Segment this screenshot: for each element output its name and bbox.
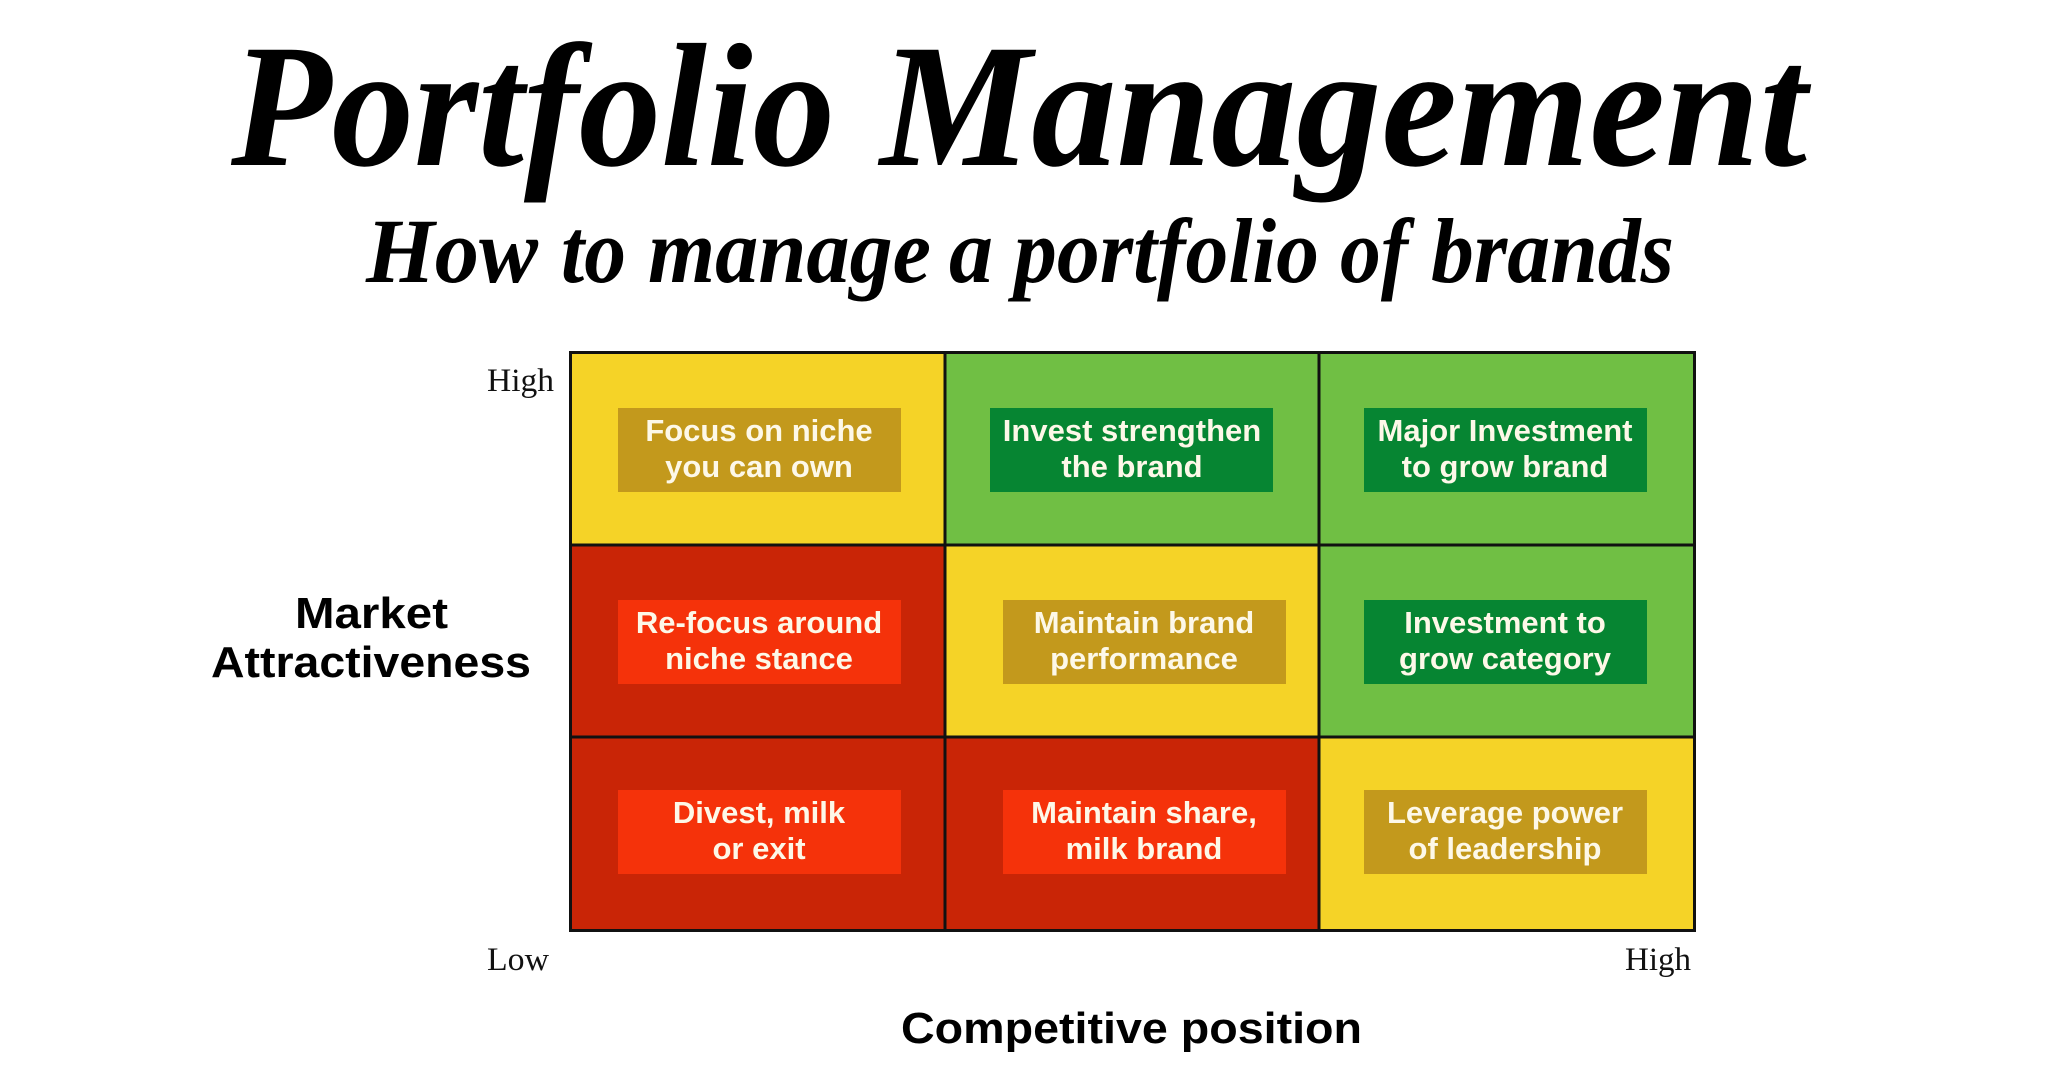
strategy: divest: or exit	[712, 831, 806, 866]
strategy: grow category: Investment to	[1404, 605, 1606, 640]
strategy: invest strengthen: Invest strengthen	[1003, 413, 1261, 448]
y axis title: Market	[295, 589, 448, 638]
matrix	[570, 352, 1695, 930]
subtitle	[365, 200, 1674, 302]
strategy: focus on niche: you can own	[665, 449, 853, 484]
strategy: focus on niche: Focus on niche	[645, 413, 873, 448]
strategy: re-focus: Re-focus around	[636, 605, 882, 640]
subtitle: portfolio	[1007, 200, 1319, 302]
strategy: invest strengthen	[990, 408, 1273, 492]
strategy: maintain performance: performance	[1050, 641, 1238, 676]
strategy: grow category	[1364, 600, 1647, 684]
strategy: maintain performance: Maintain brand	[1034, 605, 1254, 640]
y axis title: Attractiveness	[211, 638, 531, 687]
strategy: divest	[618, 790, 901, 874]
strategy: leverage power: of leadership	[1409, 831, 1601, 866]
strategy: major investment: to grow brand	[1402, 449, 1608, 484]
y axis high label: High	[487, 363, 555, 399]
y axis low label: Low	[487, 942, 549, 978]
grid lines	[570, 352, 1695, 930]
subtitle: a	[949, 200, 993, 302]
strategy: maintain share: Maintain share,	[1031, 795, 1257, 830]
strategy: invest strengthen: the brand	[1061, 449, 1203, 484]
strategy: maintain share: milk brand	[1066, 831, 1222, 866]
subtitle: of	[1340, 200, 1415, 302]
strategy: grow category: grow category	[1399, 641, 1612, 676]
strategy: major investment	[1364, 408, 1647, 492]
strategy: re-focus: niche stance	[665, 641, 853, 676]
strategy: major investment: Major Investment	[1378, 413, 1632, 448]
subtitle: manage	[648, 200, 931, 302]
subtitle: How	[365, 200, 539, 302]
subtitle: to	[561, 200, 626, 302]
strategy: maintain share	[1003, 790, 1286, 874]
title: Portfolio	[230, 9, 835, 204]
strategy: leverage power: Leverage power	[1387, 795, 1623, 830]
x axis title: Competitive position	[901, 1004, 1362, 1053]
cell backgrounds	[571, 353, 1694, 930]
strategy: leverage power	[1364, 790, 1647, 874]
strategy: re-focus	[618, 600, 901, 684]
strategy: divest: Divest, milk	[673, 795, 846, 830]
y axis title	[211, 589, 531, 687]
strategy: focus on niche	[618, 408, 901, 492]
strategy: maintain performance	[1003, 600, 1286, 684]
title	[230, 9, 1812, 204]
subtitle: brands	[1431, 200, 1674, 302]
x axis high label: High	[1625, 942, 1692, 978]
title: Management	[877, 9, 1812, 204]
